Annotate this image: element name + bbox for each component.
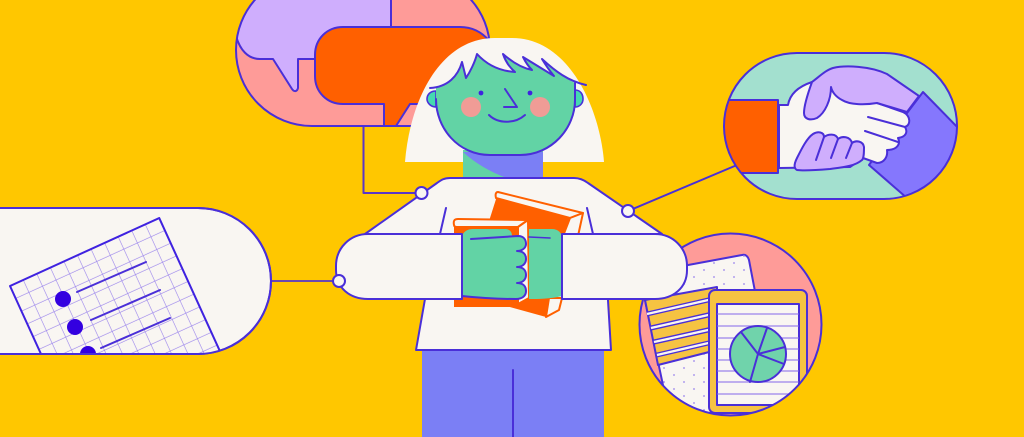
bubble outline xyxy=(236,0,490,126)
chart: pie xyxy=(730,326,786,382)
pill background xyxy=(0,208,271,354)
panel: checklist xyxy=(0,207,272,355)
right ear xyxy=(575,90,583,107)
panel: handshake xyxy=(720,53,965,205)
pill outline xyxy=(0,208,271,354)
face xyxy=(436,54,575,155)
icon: purple upper hand xyxy=(804,66,919,119)
fringe xyxy=(430,54,586,88)
dotted lower page xyxy=(660,354,710,412)
front book xyxy=(454,219,529,307)
dotted back page xyxy=(676,254,756,294)
striped yellow page xyxy=(645,287,717,365)
icon: orange speech bubble xyxy=(315,27,500,126)
node: shoulder right xyxy=(622,205,634,217)
icon: purple sleeve xyxy=(868,91,956,196)
smile xyxy=(489,115,525,122)
sweater creases xyxy=(440,208,593,234)
front hand outline xyxy=(462,236,526,299)
mint pill background xyxy=(724,53,957,199)
connector: handshake to shoulder xyxy=(628,165,737,211)
pill outline xyxy=(724,53,957,199)
back book xyxy=(470,192,583,317)
torso xyxy=(365,178,662,350)
left ear xyxy=(427,91,436,107)
circle outline xyxy=(640,234,822,416)
neck xyxy=(463,150,543,179)
cheeks xyxy=(461,97,550,117)
front hand xyxy=(462,229,526,299)
icon: orange cuff xyxy=(720,100,778,173)
icon: purple speech bubble xyxy=(236,0,391,91)
icon: grid paper with bullets xyxy=(9,217,220,353)
pink circle background xyxy=(640,234,822,416)
node: shoulder left xyxy=(416,187,428,199)
hair xyxy=(405,38,604,162)
legs xyxy=(422,350,604,437)
finger lines xyxy=(865,117,905,142)
panel: speech bubbles xyxy=(236,0,500,126)
icon: white hand xyxy=(779,82,909,168)
back hand xyxy=(529,229,562,299)
document sheet with lines xyxy=(717,304,799,405)
leg divider xyxy=(512,370,514,437)
node: arm xyxy=(333,275,345,287)
panel: documents and pie chart xyxy=(640,234,822,430)
connector: checklist to arm xyxy=(271,280,339,282)
neck shadow xyxy=(463,152,543,178)
right arm xyxy=(562,234,687,299)
icon: purple lower hand xyxy=(795,132,864,170)
nose xyxy=(504,89,517,107)
chin outline xyxy=(436,83,575,155)
tablet frame xyxy=(709,290,807,413)
pink pill background xyxy=(236,0,490,126)
character xyxy=(336,38,687,437)
eyes xyxy=(479,91,532,95)
back hand line xyxy=(529,237,550,238)
connector: speech bubbles to shoulder xyxy=(364,126,421,193)
left arm xyxy=(336,234,462,299)
